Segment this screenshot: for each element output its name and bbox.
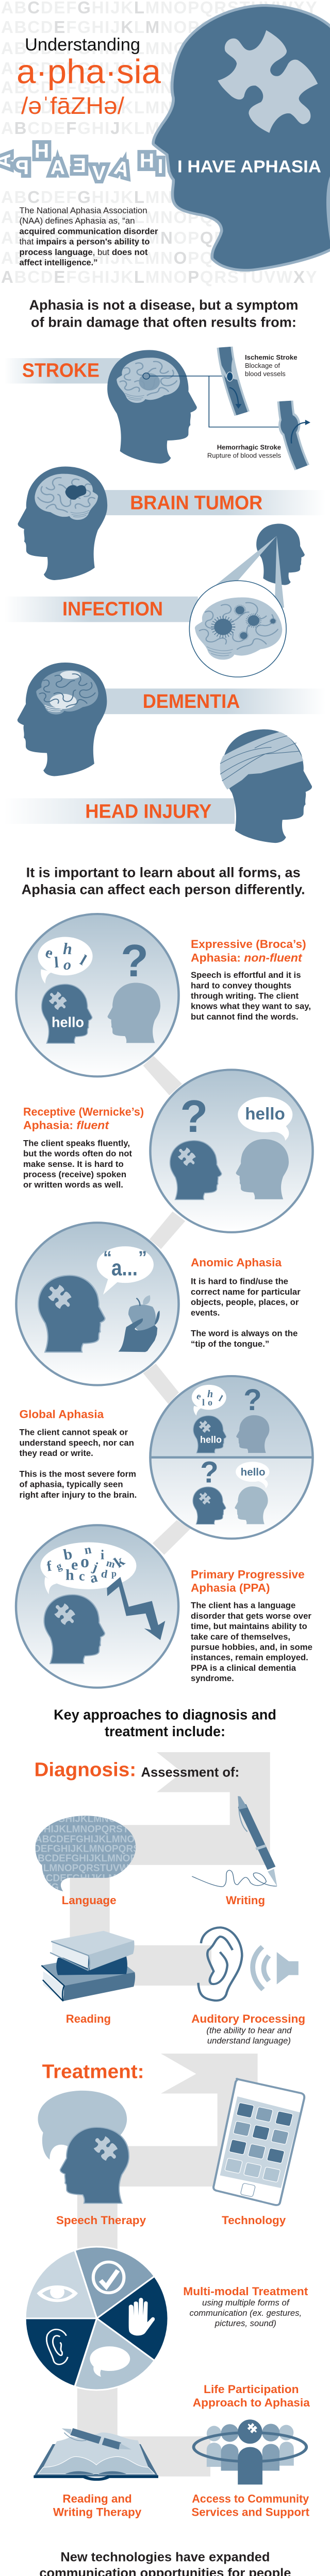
bubble letters and hello: l [54,954,59,971]
label: head injury: HEAD INJURY [85,801,211,823]
text: receptive aphasia [23,1105,144,1190]
definition text: The National Aphasia Association [20,206,147,215]
definition text: acquired communication disorder [20,227,158,236]
bubble text: a...: “ [103,1248,112,1267]
text: global aphasia: of aphasia, typically seen [20,1480,123,1489]
diagnosis heading: Assessment of: [141,1764,239,1780]
icon: ear with speaker [198,1927,299,2001]
icon: speech bubble [90,2346,130,2377]
heading: key approaches [54,1706,276,1739]
background alphabet pattern: ABCDEFGHIJKLMNOPQRS [1,208,240,227]
text: global aphasia: they read or write. [20,1448,93,1458]
text: expressive aphasia: through writing. The client [191,991,299,1001]
background alphabet pattern: ABCDEFGHIJKLMNOPQRS [1,59,240,78]
background alphabet pattern: ABCDEFGHIJKLMNOPQRS [1,188,240,207]
bubble text: global: l [217,1393,224,1403]
scrambled speech letters: V [92,162,106,184]
scrambled speech letters: I [158,156,163,178]
ischemic vessel icon [220,347,242,414]
scrambled speech letters: A [51,157,65,179]
bubble letters: ppa: d [100,1567,109,1581]
text: global aphasia: The client cannot speak or [20,1428,128,1437]
icon: language speech bubble: FGHIJKLMNOPQR [52,1814,138,1825]
panel: stroke [4,347,310,467]
labels: language and writing: Writing [226,1894,265,1907]
diagnosis ribbon path [70,1752,270,1986]
heading: learn about all forms: Aphasia can affect each person differently. [22,882,305,897]
bubble text: global [195,1383,265,1489]
icon: open book with pen [34,2428,158,2481]
background alphabet pattern [1,0,318,286]
text: anomic aphasia [191,1256,301,1349]
text: multi-modal treatment: using multiple forms of [202,2298,290,2308]
scrambled speech letters [0,140,163,184]
heading: key approaches: Key approaches to diagnosis and [54,1706,276,1722]
text: receptive aphasia: but the words often do not [23,1149,132,1159]
text: global aphasia: right after injury to the brain. [20,1490,137,1500]
text: primary progressive aphasia: Aphasia (PPA) [191,1582,270,1595]
panel: head injury [4,730,312,843]
text: global aphasia: Global Aphasia [20,1408,104,1421]
text: receptive aphasia: make sense. It is hard to [23,1159,124,1169]
labels: speech therapy and technology: Technology [222,2214,286,2227]
title: a·pha·sia [16,52,161,90]
background alphabet pattern: ABCDEFGHIJKLMNOPQRS [1,18,240,37]
text: global aphasia [20,1408,137,1500]
bubble text: a... [103,1248,147,1281]
bubble letters and hello [43,935,148,1030]
background alphabet pattern: ABCDEFGHIJKLMNOPQRS [1,78,240,97]
labels: reading and auditory processing: Auditory Processing [191,2012,305,2025]
bubble letters and hello: e [43,944,55,962]
background alphabet pattern: ABCDEFGHIJKLMNOPQRS [1,98,240,117]
icon: books [41,1931,135,2001]
bubble text: global: hello [241,1467,265,1478]
text: expressive aphasia: hard to convey thoughts [191,980,291,990]
panel: brain tumor [18,467,326,580]
panel: dementia [18,663,326,776]
text: global aphasia: understand speech, nor can [20,1438,134,1448]
bubble letters and hello: o [63,956,71,973]
text: primary progressive aphasia: Primary Progressive [191,1568,305,1581]
scrambled speech letters: H [140,150,154,172]
bubble text: global: l [202,1397,205,1408]
icon: language speech bubble [35,1816,136,1892]
bubble text: global: e [195,1391,203,1401]
text: anomic aphasia: correct name for particular [191,1287,301,1297]
icon: language speech bubble: BCDEFGHIJKLMN [39,1873,124,1884]
stroke labels [22,353,298,460]
diagnosis heading [34,1759,239,1781]
text: receptive aphasia: or written words as well. [23,1180,123,1190]
icon: check [93,2262,124,2293]
bubble letters and hello: h [63,939,72,958]
labels: language and writing [62,1894,265,1907]
bubble text: question and hello [180,1091,285,1142]
heading: learn about all forms [22,865,305,897]
text: primary progressive aphasia: The client has a language [191,1601,295,1611]
bubble text: global: ? [243,1383,262,1417]
bubble text: global: hello [200,1435,222,1445]
definition text: that impairs a person's ability to [20,238,150,247]
icon: language speech bubble: BCDEFGHIJKLMNOPQRS [38,1853,158,1864]
bubble letters: ppa: h [65,1566,74,1583]
stroke labels: blood vessels [245,370,286,378]
panel: global aphasia illustration [150,1376,314,1555]
text: expressive aphasia [191,938,311,1022]
bubble letters and hello: ? [121,935,148,986]
stroke labels: Ischemic Stroke [245,353,298,361]
bubble text: global: o [208,1397,212,1408]
label: infection: INFECTION [62,598,163,620]
icon: eye [37,2285,78,2302]
text: expressive aphasia: Speech is effortful and it is [191,970,301,980]
scrambled speech letters: E [73,155,86,177]
text: primary progressive aphasia: take care of themselves, [191,1632,290,1641]
bubble text: global: ? [200,1456,219,1489]
bubble letters: ppa: e [71,1556,78,1573]
diagnosis heading: Diagnosis: [34,1759,136,1781]
icon: language speech bubble: GHIJKLMNOPQRSTUVWX [36,1824,158,1835]
text: expressive aphasia: knows what they want to say, [191,1002,311,1011]
text: multi-modal treatment: Multi-modal Treatment [183,2285,308,2298]
text: receptive aphasia: Aphasia: fluent [23,1119,110,1131]
definition text: (NAA) defines Aphasia as, “an [20,216,135,226]
scrambled speech letters: P [15,157,29,179]
label: dementia: DEMENTIA [143,691,240,713]
text: primary progressive aphasia: instances, remain employed. [191,1653,308,1663]
bubble letters and hello: l [77,952,89,969]
panel: infection [4,524,305,677]
bubble letters: ppa: b [62,1545,74,1564]
text: expressive aphasia: but cannot find the words. [191,1012,299,1022]
text: life participation: Approach to Aphasia [193,2396,310,2409]
bubble text: a...: ” [138,1248,147,1267]
chart: multi-modal pie wheel [25,2247,168,2390]
text: primary progressive aphasia [191,1568,312,1683]
text: primary progressive aphasia: syndrome. [191,1673,234,1683]
bubble letters: ppa: p [111,1568,117,1579]
text: anomic aphasia: Anomic Aphasia [191,1256,282,1269]
bubble letters: ppa: f [46,1558,53,1575]
bubble letters: ppa: j [90,1559,100,1574]
bubble letters and hello: hello [52,1014,84,1030]
text: multi-modal treatment: pictures, sound) [214,2318,276,2328]
text: anomic aphasia: The word is always on the [191,1329,298,1338]
text: primary progressive aphasia: PPA is a clinical dementia [191,1663,296,1673]
text: anomic aphasia: objects, people, places, or [191,1297,299,1307]
hemorrhagic vessel icon [278,401,310,467]
background alphabet pattern: ABCDEFGHIJKLMNOPQRS [1,39,240,58]
panel: anomic aphasia illustration [16,1223,179,1404]
bubble text: a...: a... [111,1255,138,1281]
text: global aphasia: This is the most severe form [20,1469,136,1479]
bubble text: global: h [207,1388,213,1400]
text: primary progressive aphasia: pursue hobbies, and, in some [191,1642,312,1652]
panel: expressive aphasia illustration [16,914,182,1095]
icon: language speech bubble: EFG [39,1882,59,1893]
heading: symptom of brain damage: of brain damage that often results from: [31,315,296,330]
labels: reading therapy and community: Reading and [62,2492,132,2505]
heading: learn about all forms: It is important to learn about all forms, as [26,865,301,880]
icon: speech therapy head [38,2091,128,2203]
bubble letters: ppa: m [105,1557,117,1570]
stroke labels: Blockage of [245,362,280,369]
bubble letters: ppa: o [80,1552,89,1571]
text: primary progressive aphasia: disorder that gets worse over [191,1611,311,1621]
labels: speech therapy and technology [56,2214,286,2227]
text: multi-modal treatment: communication (ex. gestures, [190,2308,302,2318]
title: Understanding [25,35,140,55]
labels: reading and auditory processing: understand language) [207,2036,291,2045]
text: multi-modal treatment [183,2285,308,2328]
label: brain tumor: BRAIN TUMOR [130,493,262,514]
definition text: process language, but does not [20,248,148,257]
icon: community group [194,2419,306,2485]
head statement: I HAVE APHASIA [177,157,321,176]
text: anomic aphasia: events. [191,1308,220,1317]
bubble letters: ppa: c [79,1568,85,1584]
stroke labels: Hemorrhagic Stroke [217,443,281,451]
definition text: affect intelligence.” [20,258,98,267]
labels: reading therapy and community: Writing Therapy [53,2505,142,2518]
large head with puzzle piece [155,7,330,269]
bubble letters: ppa: i [101,1547,104,1562]
heading: symptom of brain damage [29,297,298,330]
heading: new technologies [39,2550,291,2576]
text: receptive aphasia: Receptive (Wernicke’s) [23,1105,144,1118]
icon: language speech bubble: KLMNOPQRSTUVWXYZ [36,1863,148,1874]
bubble letters: ppa: a [88,1569,99,1587]
stroke labels: Rupture of blood vessels [207,452,281,460]
text: primary progressive aphasia: time, but maintains ability to [191,1621,307,1631]
text: anomic aphasia: It is hard to find/use the [191,1277,288,1286]
labels: reading therapy and community: Services and Support [191,2505,310,2518]
icon: ear [46,2329,68,2364]
title: /əˈfāZHə/ [21,92,124,119]
bubble letters: ppa [46,1543,128,1587]
bubble text: question and hello: hello [245,1104,285,1123]
labels: reading and auditory processing [66,2012,305,2045]
scrambled speech letters: H [35,140,49,162]
stroke labels: STROKE [22,360,100,382]
text: life participation: Life Participation [204,2383,299,2396]
icon: language speech bubble: DEFGHIJKLMNOPQRSTU [34,1843,153,1855]
panel: primary progressive aphasia illustration [16,1525,178,1688]
text: receptive aphasia: The client speaks fluently, [23,1138,130,1148]
heading: new technologies: New technologies have expanded [60,2550,270,2564]
labels: reading therapy and community [53,2492,310,2518]
bubble letters: ppa: k [111,1552,128,1571]
definition text [20,206,158,267]
text: expressive aphasia: Expressive (Broca’s) [191,938,306,951]
background alphabet pattern: ABCDEFGHIJKLMNOPQRS [1,228,240,247]
labels: speech therapy and technology: Speech Therapy [56,2214,146,2227]
text: anomic aphasia: “tip of the tongue.” [191,1339,269,1349]
icon: language speech bubble: ABCDEFGHIJKLMNOPQRS [35,1834,162,1845]
title [16,35,161,119]
labels: reading and auditory processing: (the ability to hear and [206,2026,292,2035]
heading: symptom of brain damage: Aphasia is not a disease, but a symptom [29,297,298,313]
text: life participation [193,2383,310,2409]
treatment ribbon path [77,2054,258,2477]
heading: key approaches: treatment include: [105,1723,225,1739]
text: receptive aphasia: process (receive) spoken [23,1170,126,1179]
scrambled speech letters: A [112,157,131,181]
background alphabet pattern: ABCDEFGHIJKLMNOPQRS [1,118,240,138]
labels: reading and auditory processing: Reading [66,2012,111,2025]
background alphabet pattern: ABCDEFGHIJKLMNOPQRS [1,248,240,267]
bubble text: question and hello: ? [180,1091,208,1142]
icon: pen writing [192,1796,277,1887]
panel: receptive aphasia illustration [150,1070,313,1249]
text: expressive aphasia: Aphasia: non-fluent [191,951,303,964]
labels: reading therapy and community: Access to Community [192,2492,309,2505]
background alphabet pattern: ABCDEFGHIJKLMNOPQRSTUVWXY [1,267,318,286]
icon: hand [129,2298,155,2335]
bubble letters: ppa: n [84,1543,92,1557]
treatment heading: Treatment: [42,2061,144,2083]
bubble letters: ppa: g [55,1560,63,1572]
labels: language and writing: Language [62,1894,117,1907]
icon: tablet with app tiles [213,2079,304,2205]
